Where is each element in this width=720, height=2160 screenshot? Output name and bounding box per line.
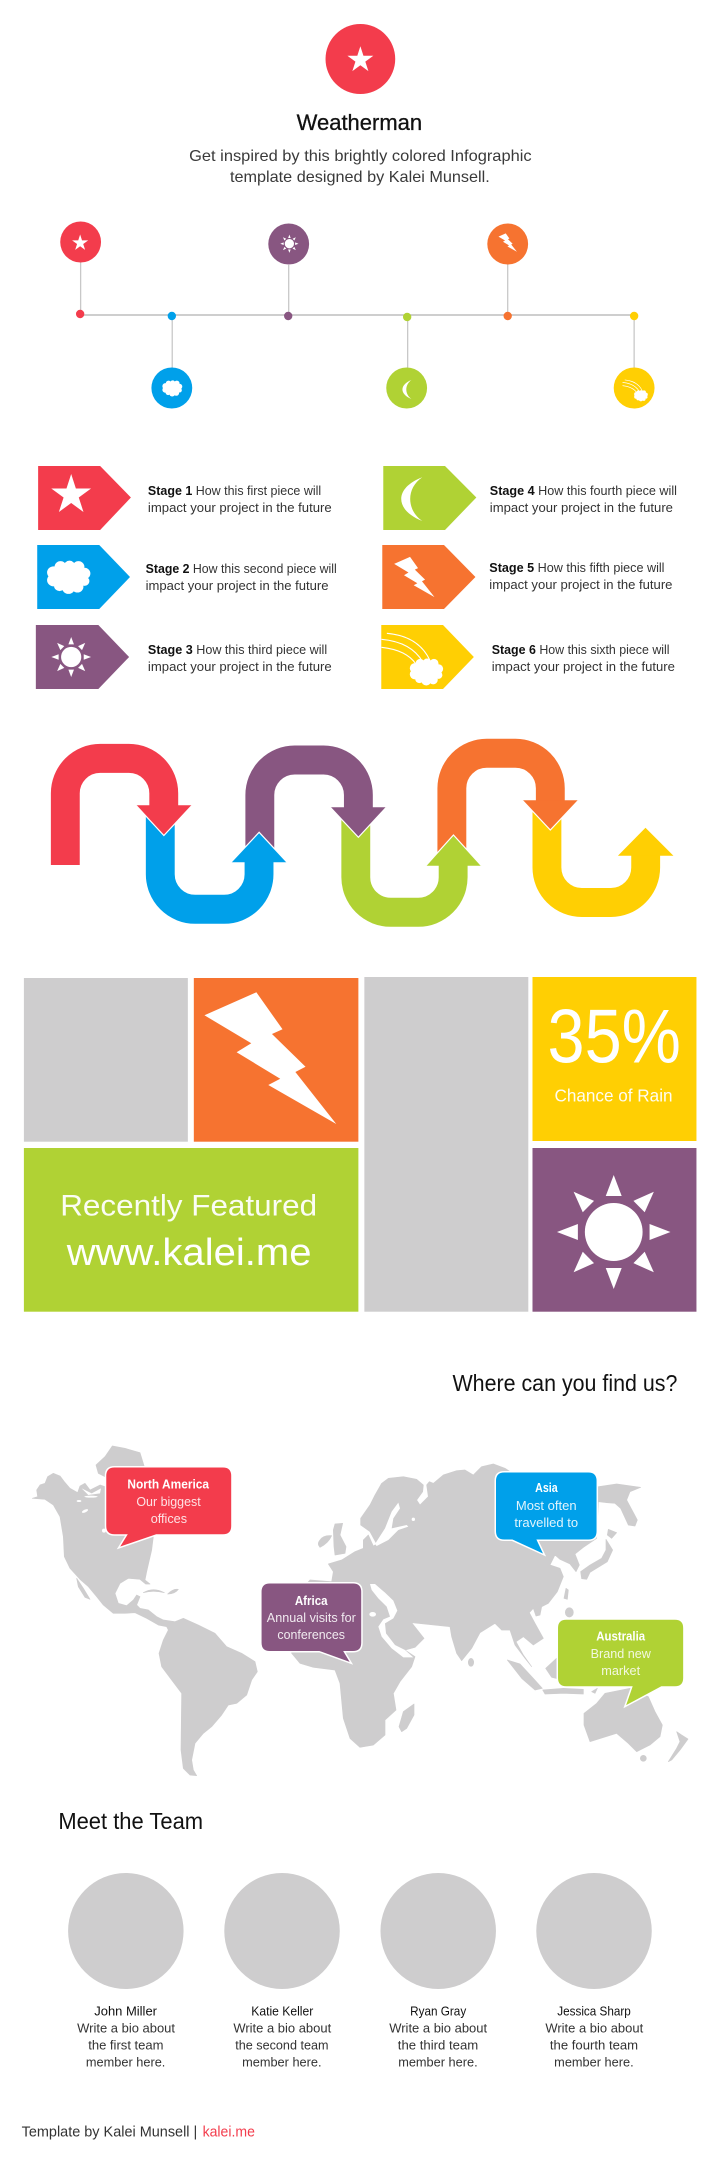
- callout: asia: travelled to: [514, 1516, 578, 1530]
- lower sections: [22, 1467, 684, 2141]
- header badge: star: [326, 24, 395, 94]
- stage 5: Stage 5 How this fifth piece will: [489, 560, 665, 575]
- footer credit: kalei.me: [203, 2124, 255, 2141]
- stage 2: impact your project in the future: [146, 578, 329, 593]
- callout: australia: market: [601, 1664, 641, 1678]
- timeline node: orange bolt: [487, 224, 528, 320]
- tile grid: [24, 977, 696, 1312]
- team member: Ryan Gray: [380, 1873, 496, 2070]
- stage 3: Stage 3 How this third piece will: [148, 642, 327, 657]
- stage 6: Stage 6 How this sixth piece will: [492, 642, 670, 657]
- team member: Ryan Gray: Write a bio about: [389, 2021, 487, 2036]
- tile: orange bolt: [194, 978, 358, 1142]
- callout: north america: offices: [151, 1512, 187, 1526]
- team member: John Miller: [68, 1873, 184, 2070]
- tile: recently featured: www.kalei.me: [66, 1232, 312, 1274]
- stage 5: impact your project in the future: [489, 577, 672, 592]
- timeline node: yellow comet: [614, 312, 655, 408]
- team member: John Miller: member here.: [86, 2055, 165, 2070]
- team member: Ryan Gray: the third team: [398, 2038, 478, 2053]
- tile: chance of rain: 35%: [548, 995, 681, 1080]
- serpentine arrows: [65, 753, 673, 912]
- team member: John Miller: the first team: [88, 2038, 164, 2053]
- stage 1: [38, 466, 332, 530]
- timeline node: red star: [60, 222, 101, 318]
- stage 2: Stage 2 How this second piece will: [146, 561, 337, 576]
- stage 6: [381, 625, 675, 689]
- timeline node: blue cloud: [151, 312, 192, 408]
- tile: chance of rain: Chance of Rain: [554, 1086, 673, 1106]
- heading: meet the team: Meet the Team: [58, 1808, 203, 1834]
- team member: Ryan Gray: member here.: [398, 2055, 478, 2070]
- subtitle: template designed by Kalei Munsell.: [230, 169, 490, 186]
- subtitle: [189, 148, 532, 186]
- upper sections: [24, 24, 696, 1396]
- team member: Katie Keller: Write a bio about: [233, 2021, 332, 2036]
- callout: asia: Most often: [516, 1499, 577, 1513]
- tile: gray placeholder: [24, 978, 188, 1142]
- tile: recently featured: [24, 1148, 358, 1312]
- team member: John Miller: Write a bio about: [77, 2021, 175, 2036]
- timeline node: green moon: [386, 313, 427, 408]
- team member: Katie Keller: [224, 1873, 340, 2070]
- arrow: blue: [160, 810, 287, 909]
- stage 4: Stage 4 How this fourth piece will: [490, 483, 677, 498]
- team member: Jessica Sharp: the fourth team: [550, 2038, 638, 2053]
- callout: africa: conferences: [277, 1628, 345, 1642]
- callout: africa: Annual visits for: [267, 1611, 356, 1625]
- stage 1: impact your project in the future: [148, 500, 332, 515]
- team member: Jessica Sharp: Jessica Sharp: [557, 2004, 631, 2019]
- team member: Katie Keller: member here.: [242, 2055, 322, 2070]
- arrow: red: [65, 758, 192, 865]
- callout: north america: North America: [127, 1478, 210, 1492]
- stage 2: [37, 545, 337, 609]
- arrow: purple: [260, 760, 386, 852]
- team member: Jessica Sharp: [536, 1873, 652, 2070]
- team member: Ryan Gray: Ryan Gray: [410, 2004, 467, 2019]
- title: Weatherman: [297, 110, 422, 135]
- timeline node: purple sun: [268, 224, 309, 320]
- arrow: yellow: [547, 804, 673, 902]
- stage 4: impact your project in the future: [490, 500, 673, 515]
- arrow: orange: [452, 753, 578, 855]
- footer credit: Template by Kalei Munsell |: [22, 2124, 197, 2141]
- callout: australia: [557, 1619, 684, 1707]
- map: americas: [32, 1446, 257, 1776]
- team member: Jessica Sharp: Write a bio about: [545, 2021, 644, 2036]
- timeline: [60, 222, 655, 408]
- map: europe asia africa: [287, 1464, 688, 1762]
- stage 4: [383, 466, 677, 530]
- tile: chance of rain: [532, 977, 696, 1141]
- stage 6: impact your project in the future: [492, 659, 675, 674]
- heading: where can you find us: Where can you find us?: [452, 1370, 677, 1396]
- team member: Jessica Sharp: member here.: [554, 2055, 634, 2070]
- callout: australia: Brand new: [591, 1647, 652, 1661]
- callout: north america: Our biggest: [136, 1495, 201, 1509]
- callout: africa: [261, 1583, 362, 1663]
- callout: asia: [495, 1472, 597, 1555]
- tile: recently featured: Recently Featured: [60, 1190, 317, 1223]
- callout: north america: [106, 1467, 232, 1548]
- callout: asia: Asia: [535, 1481, 559, 1495]
- team member: Katie Keller: Katie Keller: [251, 2004, 314, 2019]
- world map: [32, 1446, 688, 1776]
- callout: africa: Africa: [295, 1594, 329, 1608]
- callout: australia: Australia: [596, 1630, 646, 1644]
- tile: tall gray placeholder: [364, 977, 528, 1312]
- stage 5: [382, 545, 672, 609]
- subtitle: Get inspired by this brightly colored Infographic: [189, 148, 532, 165]
- arrow: green: [356, 812, 481, 912]
- stage 3: [36, 625, 332, 689]
- stage 1: Stage 1 How this first piece will: [148, 483, 321, 498]
- team member: Katie Keller: the second team: [235, 2038, 329, 2053]
- tile: purple sun: [532, 1148, 696, 1312]
- stage 3: impact your project in the future: [148, 659, 332, 674]
- team member: John Miller: John Miller: [94, 2004, 158, 2019]
